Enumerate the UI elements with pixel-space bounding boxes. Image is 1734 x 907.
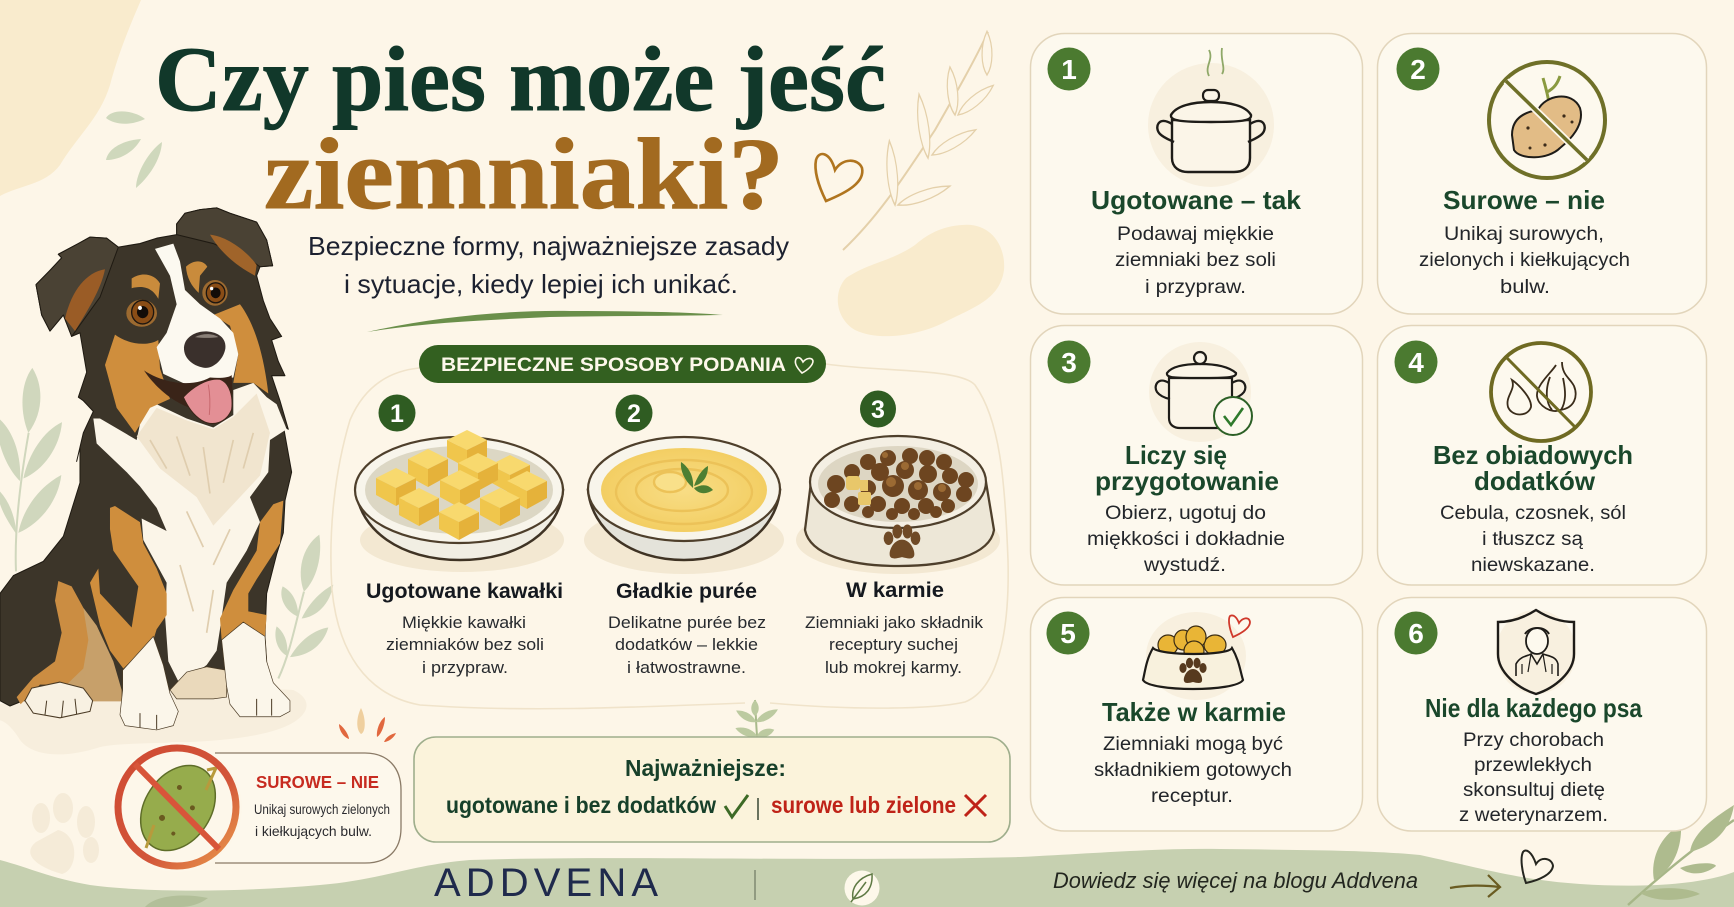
- dog ground shadow: [0, 689, 307, 754]
- badge 3: [860, 390, 896, 428]
- dog illustration: [0, 208, 307, 754]
- summary no: surowe lub zielone: [771, 792, 956, 818]
- method 1: cooked pieces: [355, 394, 564, 677]
- icon: pot with check: [1149, 342, 1252, 442]
- decorative leaf sprig behind title: [843, 31, 996, 250]
- icon: cross mark: [965, 795, 986, 816]
- paw print: faded: [30, 793, 99, 874]
- icon: crossed-out green potato: [112, 742, 242, 872]
- body text: i tłuszcz są: [1482, 528, 1583, 550]
- description: [608, 614, 766, 677]
- dog silhouette dark: [0, 208, 292, 706]
- icon: crossed-out sprouting potato: [1489, 62, 1605, 178]
- callout: raw potato warning: [112, 742, 401, 872]
- heading: Surowe – nie: [1443, 185, 1605, 215]
- dog hind paw small: [170, 667, 227, 699]
- sprig above summary box: [734, 700, 780, 745]
- description: [386, 614, 544, 677]
- description: i przypraw.: [422, 659, 508, 677]
- subtitle: i sytuacje, kiedy lepiej ich unikać.: [344, 269, 738, 299]
- body text: [1087, 502, 1285, 576]
- callout text: [254, 801, 390, 839]
- badge: 5: [1060, 618, 1076, 649]
- logo: ADDVENA: ADDVENA: [434, 861, 658, 905]
- body text: [1459, 729, 1608, 826]
- body text: niewskazane.: [1471, 554, 1595, 576]
- dog haunch belly tan: [67, 608, 122, 701]
- footer blog link: Dowiedz się więcej na blogu Addvena: [1053, 868, 1418, 893]
- badge: 3: [1061, 347, 1077, 378]
- subtitle: [308, 231, 789, 299]
- card 5: [1030, 598, 1362, 831]
- badge: [1394, 612, 1438, 654]
- badge: [1394, 340, 1438, 384]
- body text: i przypraw.: [1145, 276, 1246, 298]
- dog toes: [45, 699, 272, 729]
- dog blaze: [155, 244, 238, 385]
- icon: leaf badge: [844, 870, 880, 906]
- body text: Cebula, czosnek, sól: [1440, 502, 1626, 524]
- description: ziemniaków bez soli: [386, 636, 544, 654]
- body text: ziemniaki bez soli: [1115, 249, 1276, 271]
- pill heading: BEZPIECZNE SPOSOBY PODANIA: [441, 355, 786, 376]
- description: receptury suchej: [829, 636, 958, 654]
- description: [805, 614, 984, 677]
- paw print: [884, 524, 920, 558]
- dog foreleg left: [120, 636, 178, 730]
- body text: z weterynarzem.: [1459, 804, 1608, 826]
- callout text: Unikaj surowych zielonych: [254, 801, 390, 817]
- badge: 2: [1410, 54, 1426, 85]
- body text: składnikiem gotowych: [1094, 759, 1292, 781]
- label: W karmie: [846, 579, 944, 602]
- body text: Ziemniaki mogą być: [1103, 733, 1283, 755]
- dog mouth and tongue: [144, 370, 233, 419]
- dog bowl with kibble: [796, 436, 1000, 574]
- body text: zielonych i kiełkujących: [1419, 249, 1630, 271]
- heading: Bez obiadowych: [1433, 440, 1633, 470]
- card 1: [1030, 34, 1362, 314]
- card 2: [1378, 34, 1706, 314]
- body text: Podawaj miękkie: [1117, 223, 1274, 245]
- arrow: [1450, 875, 1500, 897]
- body text: Obierz, ugotuj do: [1105, 502, 1266, 524]
- summary heading: Najważniejsze:: [625, 755, 786, 781]
- green brush stroke: [367, 311, 723, 332]
- decorative blob: right of title: [838, 225, 1004, 336]
- basil leaf: [681, 462, 713, 493]
- inner ears: [65, 269, 105, 331]
- heading: [1095, 440, 1279, 496]
- body text: [1419, 223, 1630, 298]
- body text: receptur.: [1151, 785, 1233, 807]
- badge 3: 3: [871, 396, 885, 424]
- heading: [1433, 440, 1633, 496]
- body text: przewlekłych: [1474, 754, 1592, 776]
- sparks: [339, 708, 396, 742]
- dog left leg tan: [90, 506, 167, 669]
- description: lub mokrej karmy.: [825, 659, 962, 677]
- body text: Przy chorobach: [1463, 729, 1604, 751]
- badge: [1048, 48, 1090, 90]
- leaf at footer left: [145, 895, 208, 907]
- plant behind dog: left: [0, 368, 62, 571]
- card 4: [1378, 326, 1706, 585]
- footer divider: [754, 870, 756, 900]
- badge: 1: [1061, 54, 1077, 85]
- card 6: [1378, 598, 1706, 831]
- dog foreleg right: [222, 622, 290, 717]
- summary yes: ugotowane i bez dodatków: [446, 792, 716, 818]
- title: Czy pies może jeść: [155, 28, 886, 130]
- body text: Unikaj surowych,: [1444, 223, 1604, 245]
- badge: [1046, 612, 1090, 654]
- panel: summary: [414, 737, 1010, 842]
- icon: pill heart: [795, 358, 813, 373]
- heading: przygotowanie: [1095, 466, 1279, 496]
- card 3: [1030, 326, 1362, 585]
- heading: Ugotowane – tak: [1091, 185, 1302, 215]
- icon: heart outline by title: [815, 154, 862, 201]
- heading: Nie dla każdego psa: [1425, 693, 1642, 723]
- footer wave: [0, 849, 1734, 907]
- pill heading: [419, 345, 826, 383]
- heading: dodatków: [1474, 466, 1596, 496]
- dog eyes: [126, 300, 157, 327]
- dog right leg tan: [220, 501, 283, 640]
- icon: bowl of potatoes with heart: [1143, 612, 1250, 700]
- callout heading: SUROWE – NIE: [256, 772, 379, 792]
- bowl with potato cubes: [355, 430, 564, 572]
- plant behind dog: right: [275, 535, 333, 679]
- description: Ziemniaki jako składnik: [805, 614, 984, 632]
- body text: [1115, 223, 1276, 298]
- description: i łatwostrawne.: [627, 659, 746, 677]
- body text: skonsultuj dietę: [1463, 779, 1605, 801]
- badge: [1396, 48, 1440, 90]
- label: Gładkie purée: [616, 580, 757, 603]
- description: Delikatne purée bez: [608, 614, 766, 632]
- badge 1: 1: [390, 400, 404, 428]
- dog chest shading: [137, 394, 270, 526]
- panel: safe ways outline: [331, 364, 1008, 709]
- description: Miękkie kawałki: [402, 614, 526, 632]
- small leaves near title: [106, 111, 162, 188]
- dog brows: [132, 274, 160, 299]
- icon: vet in shield: [1496, 610, 1576, 694]
- label: Ugotowane kawałki: [366, 580, 563, 603]
- badge 1: [378, 394, 416, 432]
- method 2: smooth puree: [584, 394, 784, 677]
- badge: 4: [1408, 347, 1424, 378]
- badge: 6: [1408, 618, 1424, 649]
- dog hind paw: [25, 682, 93, 718]
- bowl with puree: [584, 437, 784, 574]
- method 3: in dog food: [796, 390, 1000, 677]
- body text: bulw.: [1500, 276, 1550, 298]
- icon: heart footer: [1522, 850, 1553, 883]
- dog left ear: [36, 237, 118, 336]
- dog tan cheeks: [105, 335, 170, 433]
- badge 2: 2: [627, 400, 641, 428]
- icon: crossed-out onion and garlic: [1491, 343, 1591, 441]
- title: [155, 28, 886, 231]
- body text: miękkości i dokładnie: [1087, 528, 1285, 550]
- heading: Liczy się: [1125, 440, 1227, 470]
- leaf sprig at footer right: [1628, 805, 1734, 905]
- callout text: i kiełkujących bulw.: [255, 823, 372, 839]
- body text: [1094, 733, 1292, 807]
- dog nose: [184, 331, 225, 368]
- callout box: [215, 753, 401, 863]
- badge 2: [616, 394, 652, 432]
- dog haunch orange: [17, 581, 88, 704]
- heading: Także w karmie: [1102, 697, 1286, 727]
- body text: wystudź.: [1143, 554, 1226, 576]
- icon: steaming pot: [1148, 48, 1274, 187]
- subtitle: Bezpieczne formy, najważniejsze zasady: [308, 231, 789, 261]
- body text: [1440, 502, 1626, 576]
- icon: check mark: [725, 795, 748, 817]
- description: dodatków – lekkie: [615, 636, 758, 654]
- decorative blob: top left: [0, 0, 141, 196]
- title: ziemniaki?: [264, 118, 784, 231]
- dog chest white: [93, 383, 287, 685]
- dog right ear: [177, 208, 273, 267]
- badge: [1048, 340, 1090, 384]
